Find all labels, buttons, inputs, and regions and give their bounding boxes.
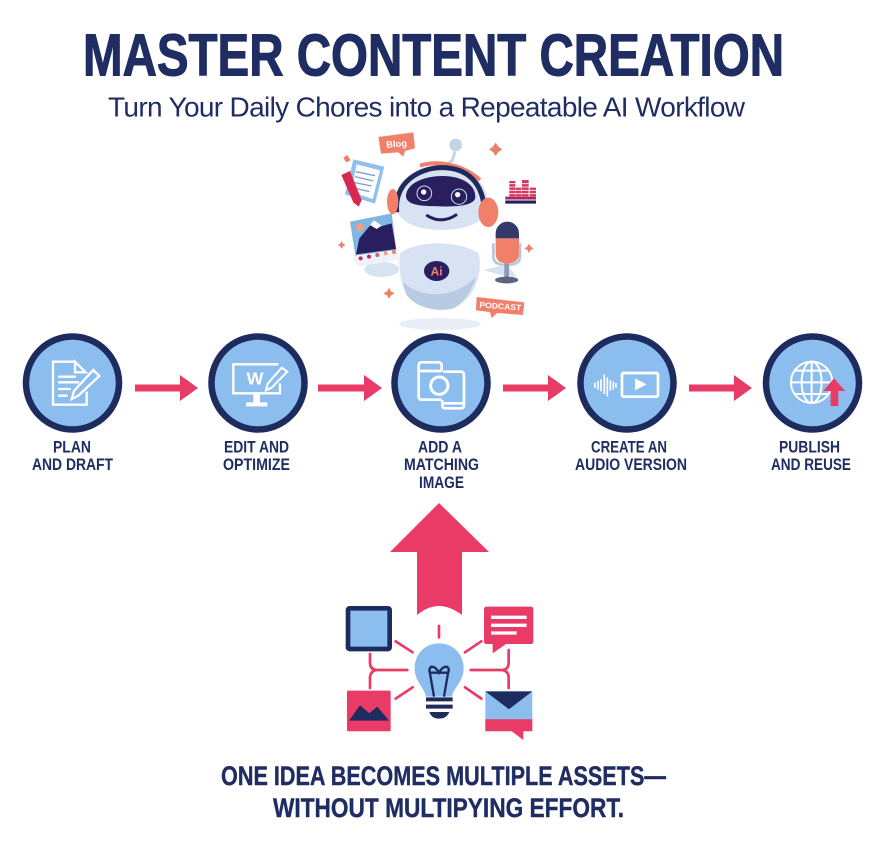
- Blog bubble: Blog: [386, 138, 408, 150]
- sparkles: [338, 143, 534, 299]
- icon: chat bubble: [484, 607, 533, 653]
- step 5 circle: [766, 336, 859, 430]
- step 2: edit and optimize: [212, 336, 304, 474]
- icon: picture: [347, 691, 391, 731]
- label: [771, 438, 851, 474]
- label: [223, 438, 290, 474]
- big upward arrow: [390, 503, 489, 615]
- robot head: [387, 163, 498, 230]
- label: EDIT AND: [224, 438, 289, 456]
- label: AND DRAFT: [32, 456, 113, 474]
- icon: globe with upload arrow: [791, 362, 845, 406]
- step 4 circle: [580, 336, 674, 430]
- idea diagram: [347, 607, 533, 740]
- robot body: Ai: [431, 264, 443, 278]
- closing statement: WITHOUT MULTIPYING EFFORT.: [273, 793, 624, 823]
- step 5: publish and reuse: [766, 336, 859, 474]
- arrow 1: [135, 375, 198, 401]
- icon: document and pencil: [53, 362, 99, 405]
- icon: monitor with W: W: [246, 368, 263, 388]
- label: CREATE AN: [591, 438, 667, 456]
- step 1: plan and draft: [26, 336, 119, 474]
- connector lines: [370, 626, 509, 699]
- label: PLAN: [53, 438, 91, 456]
- icon: envelope: [485, 691, 532, 740]
- antenna: [446, 139, 462, 165]
- robot shadow: [399, 318, 481, 330]
- step 3: add a matching image: [394, 336, 488, 492]
- robot body: [399, 243, 480, 310]
- arrow 4: [689, 375, 752, 401]
- label: [404, 438, 479, 492]
- arrow 3: [503, 375, 566, 401]
- step 3 circle: [394, 336, 488, 430]
- step 2 circle: [212, 336, 304, 430]
- arrow 2: [318, 375, 382, 401]
- step 1 circle: [26, 336, 119, 430]
- icon: light bulb: [415, 643, 464, 719]
- label: [32, 438, 113, 474]
- icon: square frame: [348, 608, 390, 649]
- notebook and pencil: [341, 155, 384, 207]
- illustration: AI robot: [338, 132, 537, 330]
- Blog bubble: [378, 132, 415, 157]
- label: PUBLISH: [779, 438, 840, 456]
- label: AUDIO VERSION: [575, 456, 687, 474]
- closing statement: ONE IDEA BECOMES MULTIPLE ASSETS—: [221, 761, 666, 791]
- closing statement: [221, 761, 666, 823]
- subtitle: Turn Your Daily Chores into a Repeatable AI Workflow: [108, 92, 746, 122]
- label: MATCHING: [404, 456, 479, 474]
- Podcast bubble: PODCAST: [479, 301, 522, 312]
- icon: waveform and video: [595, 373, 658, 397]
- image card: [350, 213, 399, 277]
- equalizer icon: [505, 180, 537, 204]
- microphone: [483, 222, 520, 283]
- Podcast bubble: [476, 297, 524, 318]
- label: AND REUSE: [771, 456, 851, 474]
- label: OPTIMIZE: [223, 456, 290, 474]
- step 4: create an audio version: [575, 336, 687, 474]
- label: [575, 438, 687, 474]
- label: IMAGE: [419, 474, 464, 492]
- label: ADD A: [418, 438, 462, 456]
- icon: camera and tablet: [419, 362, 464, 408]
